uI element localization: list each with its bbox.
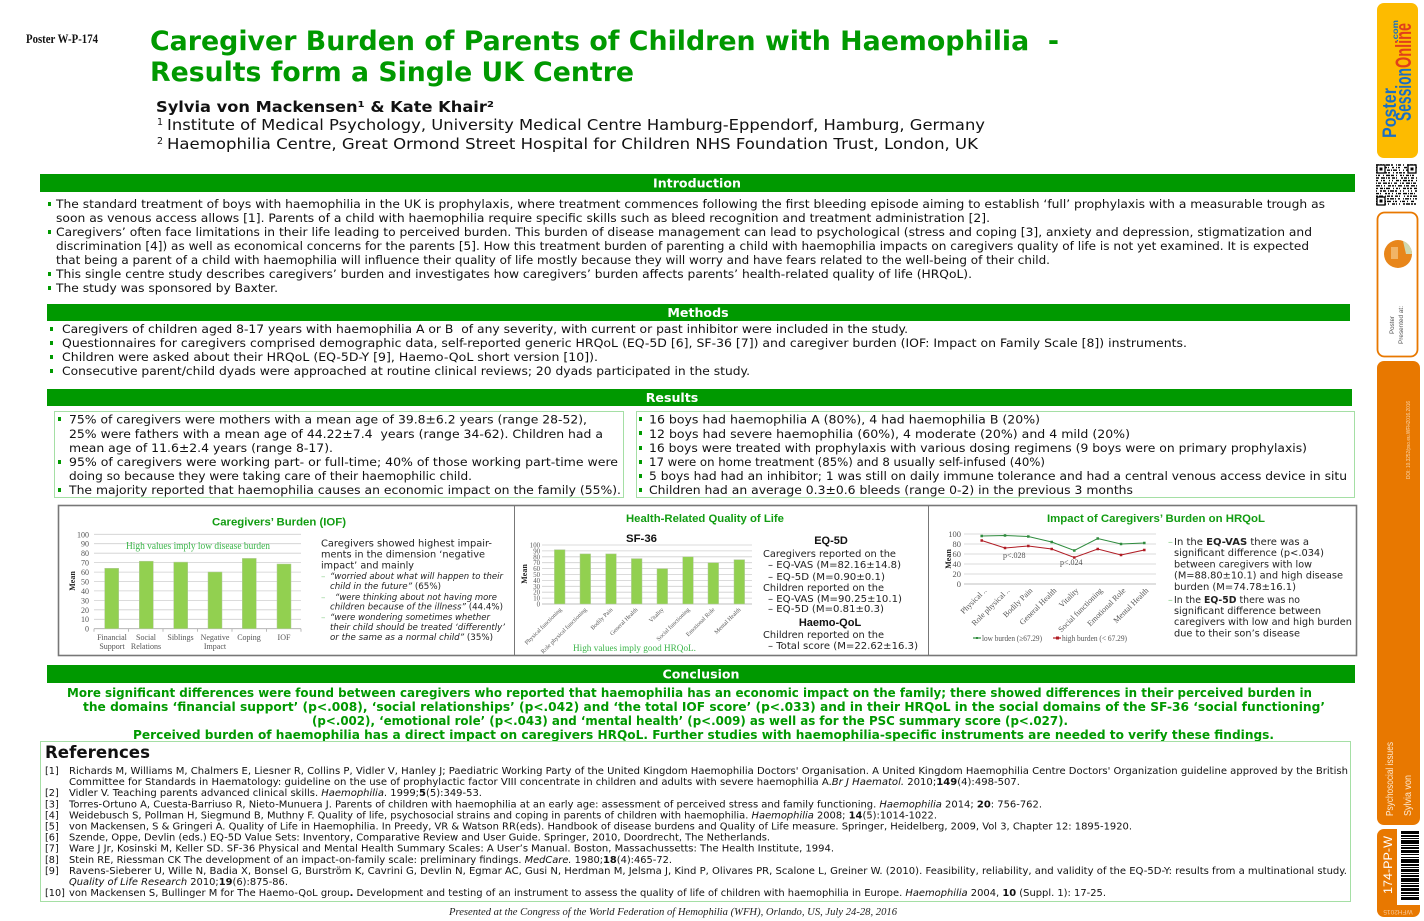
bar chart: SF-36: 0 [537,602,541,608]
introduction text: The study was sponsored by Baxter. [55,281,278,295]
reference list: Szende, Oppe, Devlin (eds.) EQ-5D Value Sets: Inventory, Comparative Review and User Guide. Springer, 2010, Doordrecht, The Netherlands. [69,833,770,844]
bar chart: SF-36: 30 [533,584,541,591]
introduction text: that being a parent of a child with haemophilia will influence their quality of life mostly because they will worry and have fears related to the well-being of their child. [56,253,1050,267]
line chart: burden vs HRQoL: 0 [957,579,961,589]
reference list: Committee for Standards in Haematology: guideline on the use of prophylactic factor VIII concentrate in children and adults with severe haemophilia A. Br J Haematol. 2010;149(4):498-507. [69,777,1020,788]
IOF commentary text: their child should be treated ‘differently’ [330,623,505,633]
bar chart: IOF scores: Coping [237,633,261,642]
authors and affiliations: Institute of Medical Psychology, University Medical Centre Hamburg-Eppendorf, Hamburg, Germany [167,116,985,134]
PosterSessionOnline logo: Online [1391,23,1416,68]
bar chart: SF-36: Mean [520,564,529,584]
introduction text: soon as venous access allows [1]. Parents of a child with haemophilia require specific skills such as bleed recognition and treatment administration [2]. [56,211,990,225]
EQ-5D and Haemo-QoL results text: – Total score (M=22.62±16.3) [768,641,918,652]
EQ-5D and Haemo-QoL results text: EQ-5D [814,535,848,547]
results left text box: mean age of 11.6±2.4 years (range 8-17). [69,441,333,455]
bar chart: SF-36: 40 [533,578,541,585]
bar chart: IOF scores: IOF [278,633,291,642]
EQ-VAS and EQ-5D findings text [1168,537,1352,640]
line chart: burden vs HRQoL: 100 [948,529,961,539]
methods text: Caregivers of children aged 8-17 years with haemophilia A or B of any severity, with current or past inhibitor were included in the study. [62,322,908,336]
reference list: [6] [45,833,59,844]
IOF commentary text: “were thinking about not having more [335,593,498,603]
line chart: burden vs HRQoL: high burden (< 67.29) [1062,634,1127,643]
conclusion text: (p<.002), ‘emotional role’ (p<.043) and ‘mental health’ (p<.009) as well as for the PSC summary score (p<.027). [312,714,1068,728]
bar chart: SF-36: High values imply good HRQoL. [573,644,696,654]
IOF commentary text: “were wondering sometimes whether [330,613,491,623]
line chart: burden vs HRQoL: General Health [1018,586,1058,627]
bar chart: IOF scores: Mean [68,571,77,591]
conclusion text: Perceived burden of haemophilia has a direct impact on caregivers HRQoL. Further studies with haemophilia-specific instruments are needed to verify these findings. [133,728,1274,742]
QR code [1376,164,1417,206]
reference list: Weidebusch S, Pollman H, Siegmund B, Muthny F. Quality of life, psychosocial strains and coping in parents of children with haemophilia. Haemophilia 2008; 14(5):1014-1022. [69,810,937,821]
methods heading bar [47,304,1350,321]
reference list: [2] [45,788,59,799]
methods text: Questionnaires for caregivers comprised demographic data, self-reported generic HRQoL (EQ-5D [6], SF-36 [7]) and caregiver burden (IOF: Impact on Family Scale [8]) instruments. [62,336,1187,350]
bar chart: IOF scores: 70 [81,559,89,568]
results right text box: 5 boys had had an inhibitor; 1 was still on daily immune tolerance and had a central venous access device in situ [649,469,1347,483]
introduction text [48,197,1325,295]
panel: conclusion [47,665,1355,742]
EQ-5D and Haemo-QoL results text: Caregivers reported on the [763,549,896,560]
footer note: Presented at the Congress of the World Federation of Hemophilia (WFH), Orlando, US, July 24-28, 2016 [448,907,898,918]
reference list: Torres-Ortuno A, Cuesta-Barriuso R, Nieto-Munuera J. Parents of children with haemophilia at an early age: assessment of perceived stress and family functioning. Haemophilia 2014; 20: 756-762. [68,799,1042,810]
EQ-VAS and EQ-5D findings text: significant difference between [1174,606,1321,617]
bar chart: IOF scores: 40 [81,587,89,596]
bar chart: IOF scores: 10 [81,615,89,624]
authors and affiliations: Haemophilia Centre, Great Ormond Street Hospital for Children NHS Foundation Trust, London, UK [167,135,979,153]
introduction text: discrimination [4]) as well as economical concerns for the parents [5]. How this treatment burden of parenting a child with haemophilia impacts on caregivers quality of life is not yet examined. It is expected [56,239,1309,253]
bar chart: SF-36: General Health [609,607,639,637]
PosterSessionOnline logo [1377,3,1418,158]
results left text box [54,412,624,498]
bar chart: SF-36: Role physical functioning [540,606,588,655]
results left text box: The majority reported that haemophilia causes an economic impact on the family (55%). [68,483,621,497]
line chart: burden vs HRQoL: p<.024 [1060,558,1083,567]
bar chart: IOF scores [68,530,301,651]
sidebar [1376,3,1420,917]
authors and affiliations: 2 [157,136,163,147]
bar chart: IOF scores: 100 [77,530,89,539]
references heading: References [45,743,150,763]
PosterSessionOnline logo: Session [1391,68,1416,121]
conclusion heading bar [47,665,1355,683]
panel: references [40,742,1350,902]
IOF commentary text: impact’ and mainly [321,560,414,572]
line chart: burden vs HRQoL: Bodily Pain [1001,586,1034,619]
reference list: Ware J Jr, Kosinski M, Keller SD. SF-36 Physical and Mental Health Summary Scales: A User’s Manual. Boston, Massachussetts: The Health Institute, 1994. [69,844,834,855]
bar chart: SF-36: Vitality [648,607,665,624]
reference list: [1] [45,766,59,777]
line chart: burden vs HRQoL: Social functioning [1056,586,1104,634]
presented at box: Presented at: [1399,306,1405,344]
line chart: burden vs HRQoL [944,529,1156,643]
health-related quality of life section [520,513,918,655]
poster number: Poster W-P-174 [26,31,98,46]
impact on HRQoL section [944,513,1352,643]
EQ-VAS and EQ-5D findings text: due to their son’s disease [1174,628,1300,640]
bar chart: IOF scores: Social [136,633,157,642]
introduction text: Caregivers’ often face limitations in their life leading to perceived burden. This burden of disease management can lead to psychological (stress and coping [3], anxiety and depression, stigmatization and [56,225,1312,239]
line chart: burden vs HRQoL: low burden (≥67.29) [982,634,1042,643]
IOF commentary text: – [321,572,325,582]
reference list: [7] [45,844,59,855]
results left text box: 95% of caregivers were working part- or full-time; 40% of those working part-time were [69,455,618,469]
PosterSessionOnline logo: Poster [1380,87,1401,138]
panel: results [47,389,1354,498]
methods text: Children were asked about their HRQoL (EQ-5D-Y [9], Haemo-QoL short version [10]). [62,350,598,364]
EQ-VAS and EQ-5D findings text: (M=88.80±10.1) and high disease [1174,570,1343,582]
line chart: burden vs HRQoL: Vitality [1057,586,1080,609]
bar chart: SF-36: 50 [533,572,541,579]
EQ-5D and Haemo-QoL results text: Haemo-QoL [799,617,861,629]
bar chart: IOF scores: 80 [81,549,89,558]
EQ-VAS and EQ-5D findings text: In the EQ-VAS there was a [1174,537,1309,548]
EQ-VAS and EQ-5D findings text: caregivers with low and high burden [1174,617,1352,628]
EQ-VAS and EQ-5D findings text: significant difference (p<.034) [1174,548,1324,559]
bar chart: IOF scores: Negative [201,633,230,642]
orange info strip [1377,361,1420,825]
results right text box: 17 were on home treatment (85%) and 8 usually self-infused (40%) [649,455,1045,469]
EQ-5D and Haemo-QoL results text: Children reported on the [763,583,884,594]
heading: SF-36: SF-36 [626,533,657,545]
EQ-5D and Haemo-QoL results text [763,535,918,652]
heading: impact: Impact of Caregivers’ Burden on HRQoL [1047,513,1265,525]
IOF commentary text: or the same as a normal child” (35%) [330,633,493,643]
line chart: burden vs HRQoL: Mental Health [1112,586,1150,625]
reference list: [10] [45,888,65,899]
methods text [50,322,1187,378]
bar chart: SF-36: 80 [533,554,541,561]
results left text box: 75% of caregivers were mothers with a mean age of 39.8±6.2 years (range 28-52), [69,412,587,426]
IOF commentary text: child in the future” (65%) [330,582,441,592]
barcode tag: 174-PP-W [1381,835,1395,894]
IOF commentary text: children because of the illness” (44.4%) [330,602,503,612]
orange info strip: DOI: 10.3252/pso.eu.WFH2016.2016 [1406,401,1412,479]
authors and affiliations: Sylvia von Mackensen¹ & Kate Khair² [156,98,494,116]
EQ-5D and Haemo-QoL results text: – EQ-5D (M=0.81±0.3) [768,604,884,615]
bar chart: SF-36: Social functioning [655,606,691,643]
congress logo [1384,240,1412,268]
bar chart: IOF scores: 0 [85,625,89,634]
PosterSessionOnline logo: .com [1391,20,1400,42]
introduction heading bar [40,174,1355,192]
IOF commentary text: ments in the dimension ‘negative [321,550,485,560]
introduction text: This single centre study describes caregivers’ burden and investigates how caregivers’ burden affects parents’ health-related quality of life (HRQoL). [55,267,972,281]
heading: caregivers burden: Caregivers’ Burden (IOF) [212,516,346,528]
methods text: Consecutive parent/child dyads were approached at routine clinical reviews; 20 dyads participated in the study. [62,364,750,378]
results right text box: 12 boys had severe haemophilia (60%), 4 moderate (20%) and 4 mild (20%) [649,427,1130,441]
reference list: [9] [45,866,59,877]
results right text box [636,412,1354,498]
reference list: [5] [45,822,59,832]
bar chart: IOF scores: 20 [81,606,89,615]
bar chart: IOF scores: 90 [81,540,89,549]
line chart: burden vs HRQoL: Mean [944,549,953,569]
EQ-5D and Haemo-QoL results text: – EQ-VAS (M=82.16±14.8) [768,560,901,571]
results right text box: Children had an average 0.3±0.6 bleeds (range 0-2) in the previous 3 months [649,483,1133,497]
line chart: burden vs HRQoL: 60 [952,549,961,559]
bar chart: IOF scores: High values imply low disease burden [126,541,270,552]
authors and affiliations [156,98,985,153]
bar chart: IOF scores: 30 [81,596,89,605]
presented at box [1378,212,1418,356]
reference list: Vidler V. Teaching parents advanced clinical skills. Haemophilia. 1999;5(5):349-53. [69,788,482,799]
reference list: Quality of Life Research 2010;19(6):875-86. [69,877,288,888]
bar chart: IOF scores: Relations [131,642,161,651]
results right text box: 16 boys had haemophilia A (80%), 4 had haemophilia B (20%) [649,412,1040,426]
authors and affiliations: 1 [157,117,163,128]
EQ-VAS and EQ-5D findings text: – [1168,537,1173,548]
bar chart: SF-36: 60 [533,566,541,573]
reference list: von Mackensen S, Bullinger M for The Haemo-QoL group . Development and testing of an instrument to assess the quality of life of children with haemophilia in Europe. Haemophilia 2004, 10 (Suppl. 1): 17-25. [69,888,1106,899]
reference list: Richards M, Williams M, Chalmers E, Liesner R, Collins P, Vidler V, Hanley J; Paediatric Working Party of the United Kingdom Haemophilia Doctors' Organisation. A United Kingdom Haemophilia Centre Doctors' Organization guideline approved by the British [69,766,1348,777]
reference list: [3] [45,799,59,810]
reference list: [8] [45,855,59,866]
heading: HRQoL: Health-Related Quality of Life [626,513,784,525]
IOF commentary text: – [321,613,325,623]
EQ-VAS and EQ-5D findings text: – [1168,595,1173,606]
barcode tag [1377,829,1420,917]
bar chart: SF-36: Physical functioning [523,606,563,646]
line chart: burden vs HRQoL: p<.028 [1003,551,1026,560]
reference list: [4] [45,810,59,821]
EQ-5D and Haemo-QoL results text: – EQ-VAS (M=90.25±10.1) [768,594,902,605]
conclusion text: the domains ‘financial support’ (p<.008), ‘social relationships’ (p<.042) and ‘the total IOF score’ (p<.033) and in their HRQoL in the social domains of the SF-36 ‘social functioning’ [83,700,1325,714]
bar chart: SF-36: Emotional Role [685,607,717,638]
bar chart: SF-36: 90 [533,548,541,555]
title [150,26,1059,88]
bar chart: IOF scores: Siblings [167,633,194,642]
results left text box: doing so because they were taking care of their haemophilic child. [69,469,472,483]
results right text box: 16 boys were treated with prophylaxis with various dosing regimens (9 boys were on primary prophylaxis) [649,441,1307,455]
conclusion heading bar: Conclusion [662,666,740,682]
bar chart: SF-36: 10 [533,596,541,603]
EQ-VAS and EQ-5D findings text: between caregivers with low [1174,560,1312,570]
line chart: burden vs HRQoL: 20 [952,569,961,579]
bar chart: SF-36 [520,542,752,655]
title: Results form a Single UK Centre [150,57,634,88]
bar chart: SF-36: 20 [533,590,541,597]
line chart: burden vs HRQoL: 80 [952,539,961,549]
bar chart: IOF scores: Financial [97,633,128,642]
bar chart: IOF scores: Support [99,642,125,651]
IOF commentary text: – [321,593,325,603]
presented at box: Poster [1390,316,1396,334]
line chart: burden vs HRQoL: Role physical .. [970,586,1011,628]
EQ-VAS and EQ-5D findings text: In the EQ-5D there was no [1174,595,1300,606]
introduction heading bar: Introduction [653,176,741,190]
reference list [45,766,1348,899]
panel: introduction [40,174,1355,295]
panel: charts frame [58,505,1356,656]
bar chart: SF-36: 70 [533,560,541,567]
line chart: burden vs HRQoL: Physical .. [959,586,988,616]
bar chart: IOF scores: 60 [81,568,89,577]
EQ-5D and Haemo-QoL results text: – EQ-5D (M=0.90±0.1) [768,572,885,583]
bar chart: SF-36: 100 [530,542,541,550]
EQ-VAS and EQ-5D findings text: burden (M=74.78±16.1) [1174,582,1296,593]
results heading bar: Results [646,390,698,405]
IOF commentary text: “worried about what will happen to their [330,572,504,582]
conclusion text: More significant differences were found between caregivers who reported that haemophilia has an economic impact on the family; there showed differences in their perceived burden in [67,686,1312,700]
methods heading bar: Methods [667,305,729,320]
reference list: von Mackensen, S & Gringeri A. Quality of Life in Haemophilia. In Preedy, VR & Watson RR(eds). Handbook of disease burdens and Quality of Life measure. Springer, Heidelberg, 2009, Vol 3, Chapter 12: 1895-1920. [69,822,1132,832]
bar chart: IOF scores: 50 [81,578,89,586]
title: Caregiver Burden of Parents of Children with Haemophilia - [150,26,1059,57]
line chart: burden vs HRQoL: 40 [952,559,961,569]
reference list: Ravens-Sieberer U, Wille N, Badia X, Bonsel G, Burström K, Cavrini G, Devlin N, Egmar AC, Gusi N, Herdman M, Jelsma J, Kind P, Olivares PR, Scalone L, Greiner W. (2010). Feasibility, reliability, and validity of the EQ-5D-Y: results from a multinational study. [69,866,1347,877]
reference list: Stein RE, Riessman CK The development of an impact-on-family scale: preliminary findings. MedCare. 1980;18(4):465-72. [69,855,672,866]
bar chart: IOF scores: Impact [204,642,227,651]
IOF commentary text: Caregivers showed highest impair- [321,538,492,550]
orange info strip: Sylvia von [1403,775,1414,816]
barcode tag: WFH2015 [1383,908,1413,915]
line chart: burden vs HRQoL: Emotional Role [1085,586,1128,628]
results heading bar [47,389,1352,406]
IOF commentary text [321,538,505,643]
conclusion text [67,686,1325,742]
caregivers burden section [68,516,505,651]
orange info strip: Psychosocial issues [1385,742,1396,816]
bar chart: SF-36: Bodily Pain [590,607,614,632]
EQ-5D and Haemo-QoL results text: Children reported on the [763,630,884,641]
bar chart: SF-36: Mental Health [714,607,742,636]
introduction text: The standard treatment of boys with haemophilia in the UK is prophylaxis, where treatment commences following the first bleeding episode aiming to establish ‘full’ prophylaxis with a measurable trough as [55,197,1325,211]
results left text box: 25% were fathers with a mean age of 44.22±7.4 years (range 34-62). Children had a [69,427,603,441]
panel: methods [47,304,1350,378]
